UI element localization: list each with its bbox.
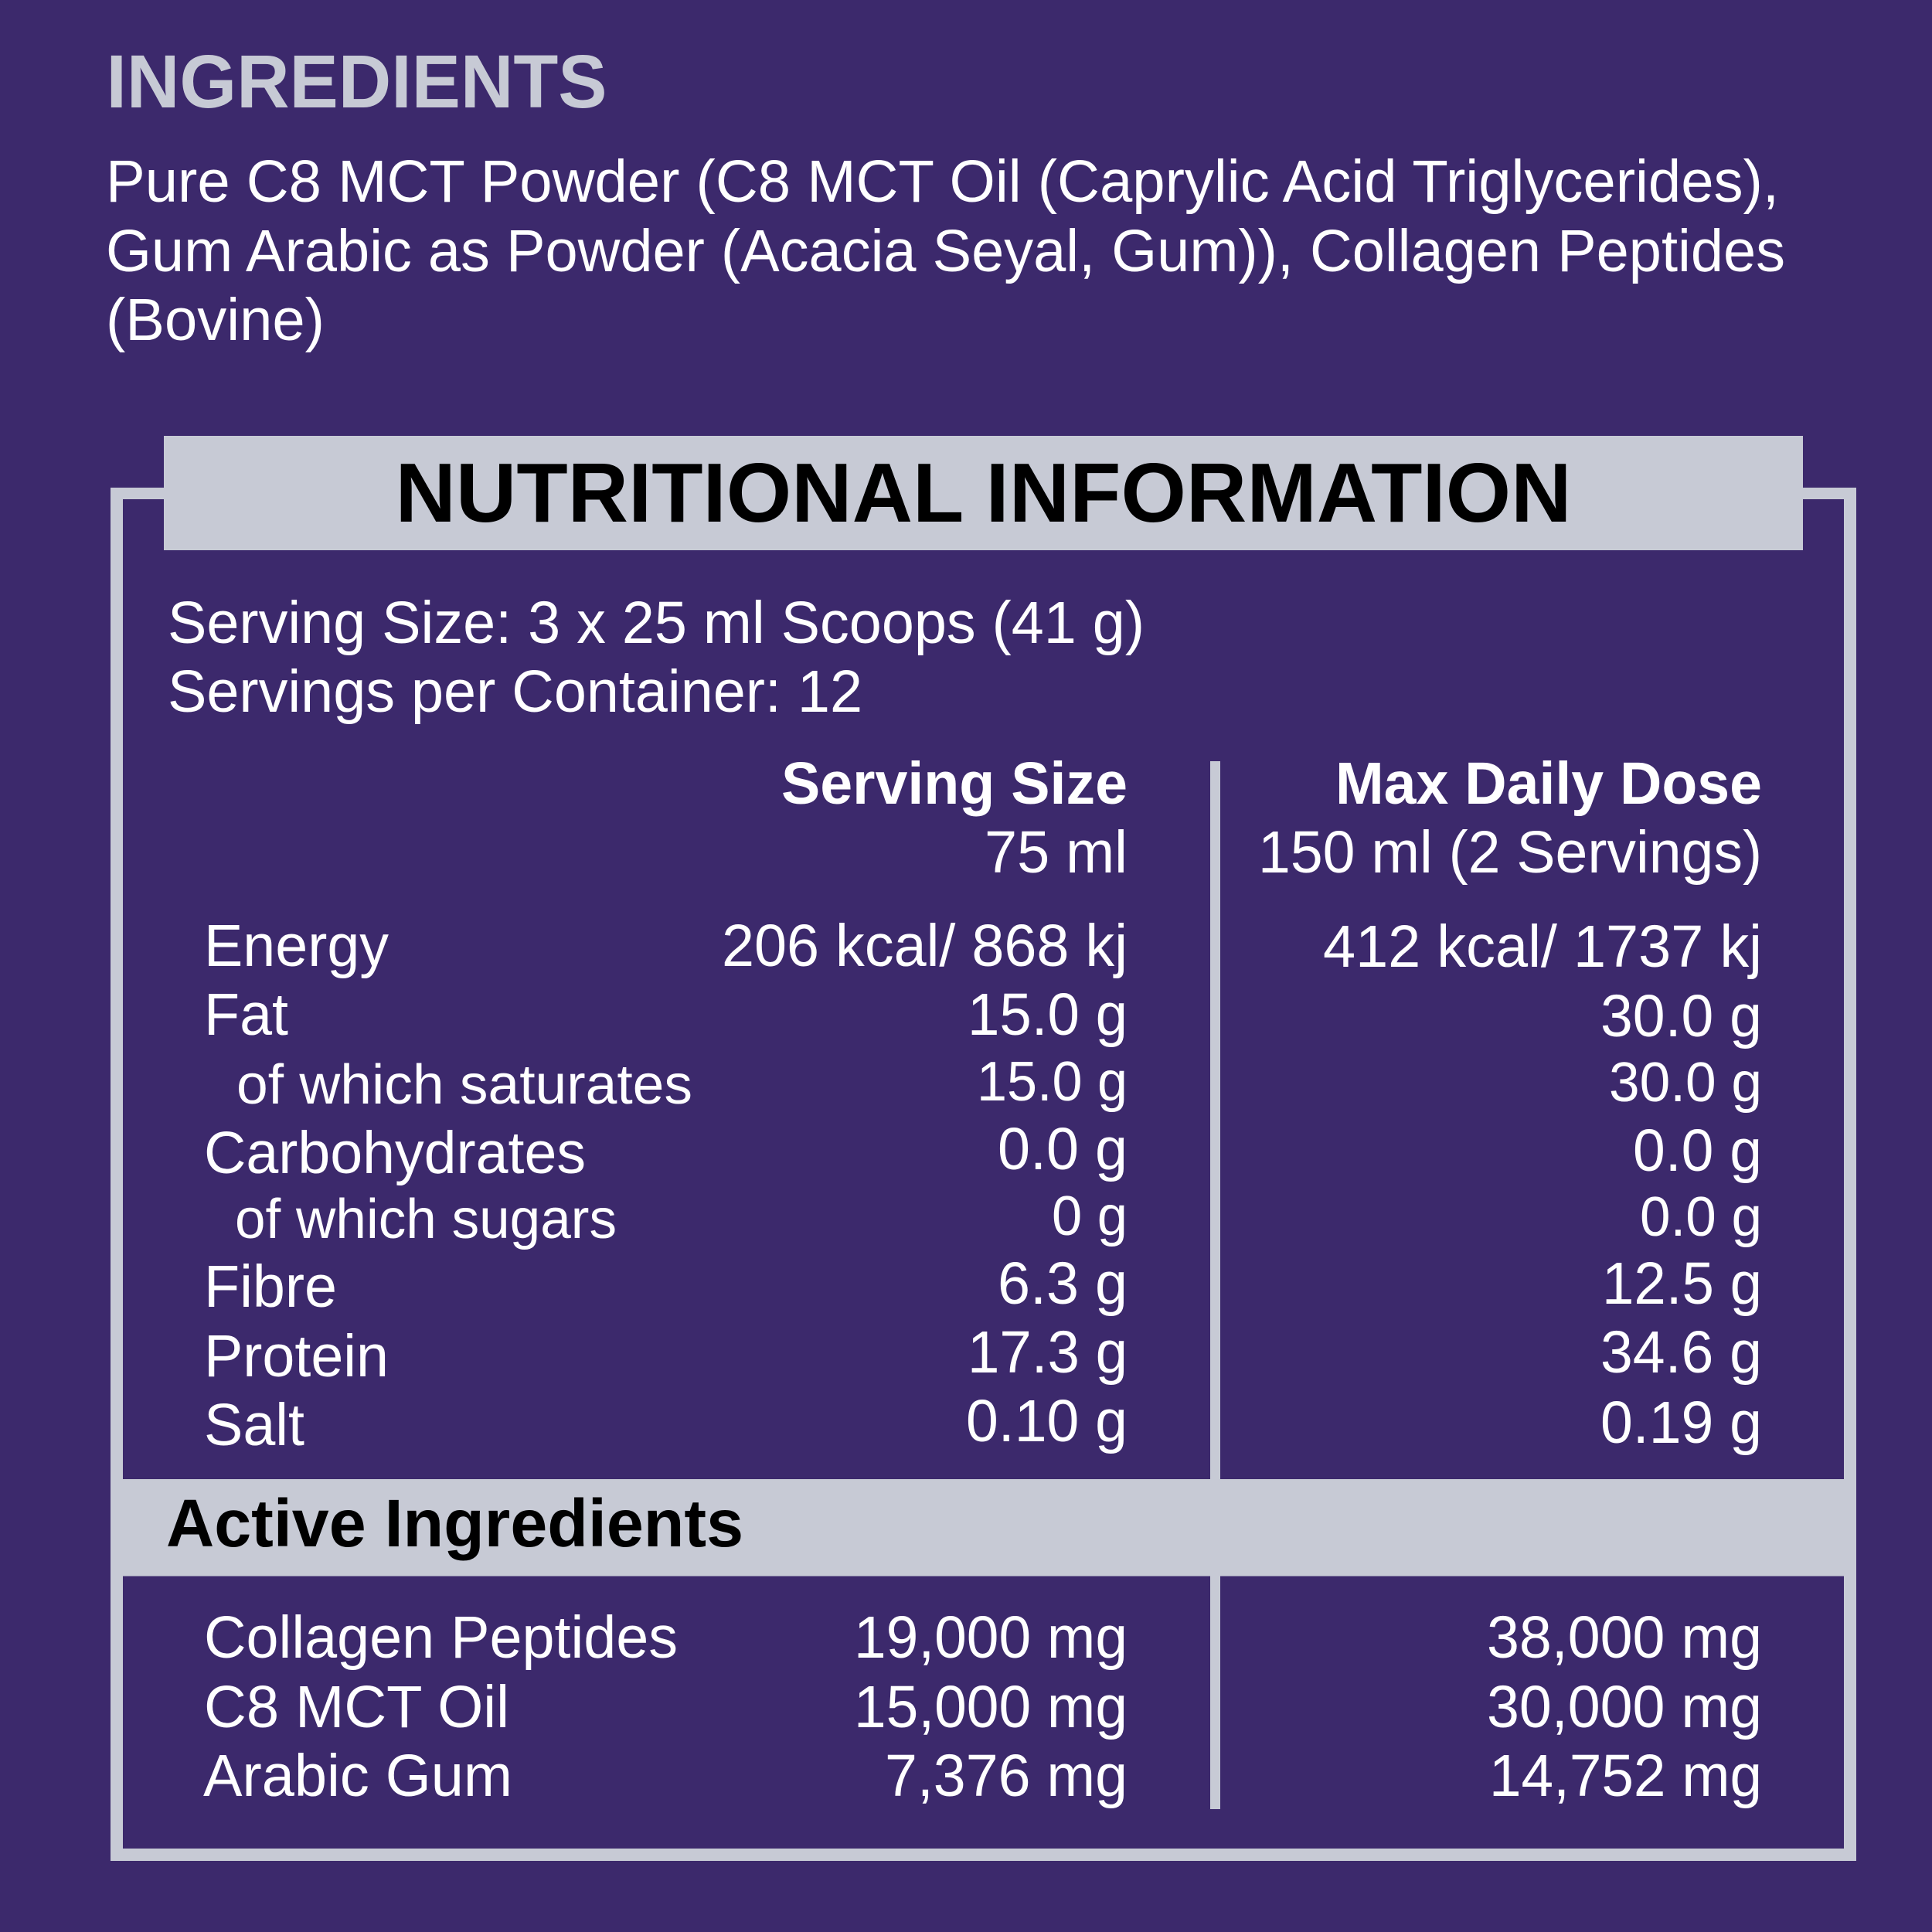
values: serving size column: 15.0 g (968, 981, 1128, 1048)
text block: ingredients list: (Bovine) (106, 287, 325, 353)
row labels: active ingredients: Arabic Gum (203, 1743, 512, 1809)
text block: ingredients list: Pure C8 MCT Powder (C8 MCT Oil (Caprylic Acid Triglycerides), (106, 148, 1779, 215)
row labels: nutrients: Fibre (204, 1253, 337, 1320)
column header: serving size: 75 ml (985, 819, 1128, 886)
column header: max daily dose (1258, 750, 1762, 886)
values: max daily dose column: 30.0 g (1600, 983, 1762, 1049)
values: active ingredients serving size: 19,000 mg (854, 1604, 1128, 1671)
row labels: nutrients: Fat (204, 981, 288, 1048)
values: active ingredients max daily dose: 14,752 mg (1489, 1743, 1762, 1809)
row labels: active ingredients: C8 MCT Oil (204, 1674, 509, 1740)
values: max daily dose column: 412 kcal/ 1737 kj (1323, 913, 1762, 980)
values: active ingredients serving size: 15,000 mg (854, 1674, 1128, 1740)
values: max daily dose column: 30.0 g (1609, 1051, 1762, 1114)
values: serving size column: 6.3 g (998, 1250, 1128, 1317)
column divider: lower (1210, 1576, 1220, 1809)
values: active ingredients max daily dose: 38,000 mg (1487, 1604, 1762, 1671)
values: max daily dose column: 12.5 g (1602, 1250, 1762, 1317)
values: active ingredients max daily dose (1487, 1604, 1762, 1809)
panel: active ingredients band (123, 1479, 1844, 1577)
values: serving size column: 0.0 g (998, 1116, 1128, 1182)
row labels: active ingredients (203, 1604, 678, 1809)
column header: serving size: Serving Size (781, 750, 1128, 817)
values: active ingredients serving size (854, 1604, 1128, 1809)
row labels: nutrients: Energy (204, 913, 389, 979)
heading: ingredients: INGREDIENTS (107, 39, 607, 124)
row labels: nutrients: Carbohydrates (204, 1120, 586, 1186)
values: serving size column: 206 kcal/ 868 kj (722, 913, 1128, 979)
heading: active ingredients: Active Ingredients (166, 1486, 743, 1561)
values: serving size column (722, 913, 1128, 1454)
text block: serving details: Servings per Container: 12 (168, 658, 862, 725)
values: serving size column: 17.3 g (968, 1319, 1128, 1386)
row labels: nutrients: of which sugars (235, 1188, 617, 1250)
values: serving size column: 15.0 g (977, 1050, 1128, 1113)
row labels: nutrients (204, 913, 692, 1458)
values: active ingredients max daily dose: 30,000 mg (1487, 1674, 1762, 1740)
values: serving size column: 0.10 g (966, 1388, 1128, 1454)
values: max daily dose column (1323, 913, 1762, 1456)
row labels: active ingredients: Collagen Peptides (204, 1604, 678, 1671)
values: max daily dose column: 0.19 g (1600, 1389, 1762, 1456)
text block: ingredients list (106, 148, 1785, 353)
text block: serving details (168, 590, 1145, 725)
row labels: nutrients: of which saturates (236, 1053, 692, 1116)
panel: title banner (164, 436, 1803, 550)
column divider: upper (1210, 761, 1220, 1480)
column header: max daily dose: Max Daily Dose (1335, 750, 1762, 817)
row labels: nutrients: Salt (204, 1392, 304, 1458)
values: active ingredients serving size: 7,376 mg (885, 1743, 1128, 1809)
values: max daily dose column: 0.0 g (1633, 1117, 1762, 1184)
heading: nutritional information: NUTRITIONAL INFORMATION (396, 446, 1572, 540)
panel: nutrition frame (111, 488, 1856, 1861)
values: serving size column: 0 g (1052, 1185, 1128, 1247)
values: max daily dose column: 34.6 g (1600, 1319, 1762, 1386)
values: max daily dose column: 0.0 g (1640, 1185, 1762, 1248)
column header: serving size (781, 750, 1128, 886)
row labels: nutrients: Protein (204, 1323, 389, 1389)
text block: ingredients list: Gum Arabic as Powder (Acacia Seyal, Gum)), Collagen Peptides (106, 218, 1785, 284)
text block: serving details: Serving Size: 3 x 25 ml Scoops (41 g) (168, 590, 1145, 656)
column header: max daily dose: 150 ml (2 Servings) (1258, 819, 1762, 886)
